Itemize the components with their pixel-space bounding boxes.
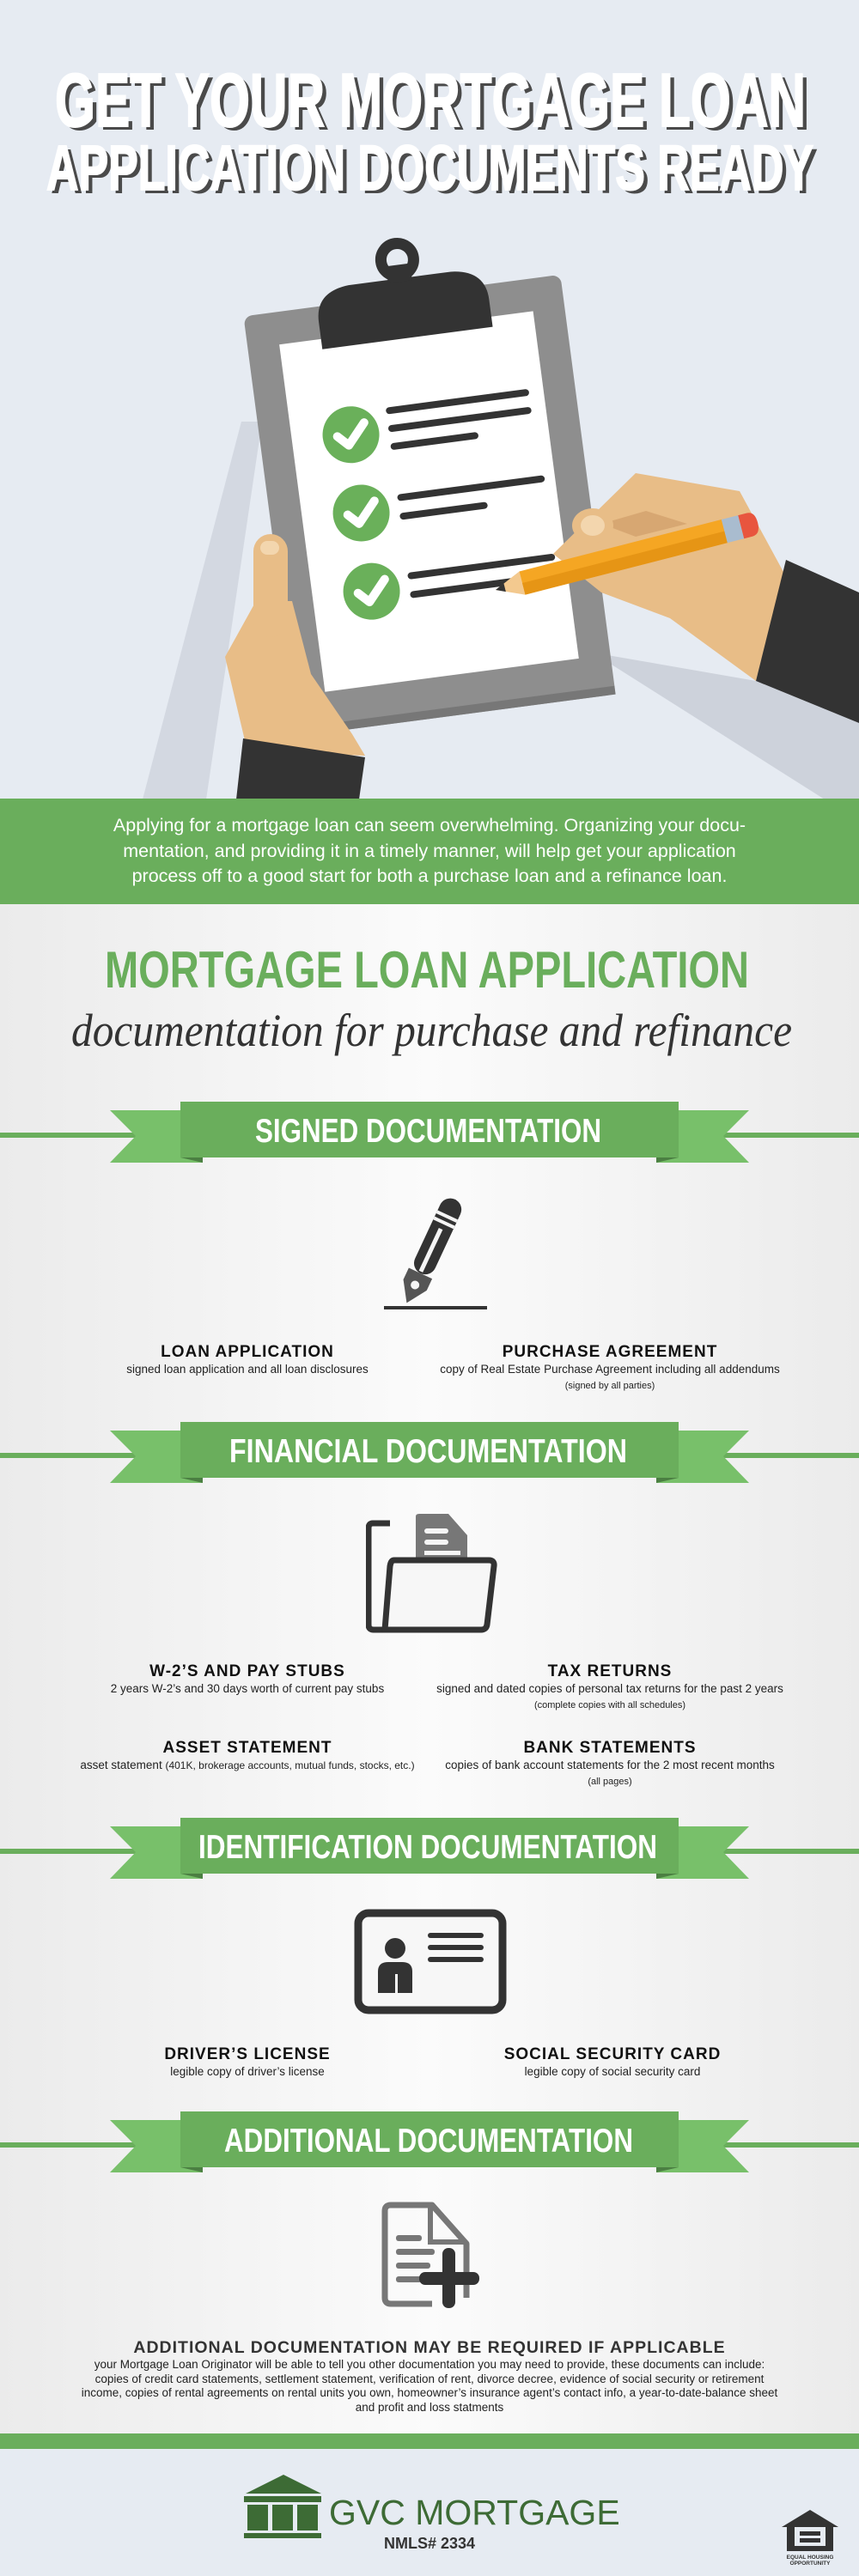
ribbon: additional documentation: ADDITIONAL DOCUMENTATION [224,2123,633,2160]
item: loan application: signed loan application and all loan disclosures [126,1363,369,1376]
item: tax returns [436,1662,783,1710]
item: asset statement [80,1739,415,1771]
thumb on pencil [572,508,613,543]
ribbon: identification documentation: IDENTIFICATION DOCUMENTATION [198,1829,657,1866]
item: driver's license [164,2045,331,2078]
additional text block: your Mortgage Loan Originator will be able to tell you other documentation you may need to provide, these documents can include: [94,2358,765,2371]
title [46,58,818,207]
ribbon: financial documentation: FINANCIAL DOCUMENTATION [229,1433,627,1470]
item: tax returns: TAX RETURNS [548,1662,672,1680]
icon: document plus [381,2202,479,2308]
item: purchase agreement [440,1343,780,1391]
pencil [493,511,761,602]
intro band: Applying for a mortgage loan can seem overwhelming. Organizing your docu- [113,815,746,835]
item: bank statements: copies of bank account statements for the 2 most recent months [445,1759,775,1771]
intro band: process off to a good start for both a purchase loan and a refinance loan. [132,866,727,886]
hero illustration [46,0,859,799]
item: bank statements: BANK STATEMENTS [523,1739,697,1757]
footer: GVC MORTGAGE [329,2493,620,2532]
additional text block: ADDITIONAL DOCUMENTATION MAY BE REQUIRED IF APPLICABLE [133,2338,726,2357]
shadow right [593,653,859,799]
ribbon: signed documentation [0,1102,859,1163]
item: loan application [126,1343,369,1376]
icon: pen [384,1199,487,1309]
item: social security card: legible copy of social security card [525,2065,700,2078]
item: purchase agreement: (signed by all parties) [565,1381,655,1391]
item: asset statement: ASSET STATEMENT [163,1739,332,1757]
icon: equal housing: OPPORTUNITY [790,2561,831,2567]
additional text block [82,2338,778,2414]
logo [244,2475,321,2538]
item: purchase agreement: PURCHASE AGREEMENT [503,1343,717,1361]
item: driver's license: DRIVER’S LICENSE [164,2045,331,2063]
item: social security card [504,2045,721,2078]
ribbon: signed documentation: SIGNED DOCUMENTATION [255,1113,601,1150]
section title: documentation for purchase and refinance [71,1005,792,1056]
shadow left [143,422,262,799]
item: w-2: 2 years W-2’s and 30 days worth of current pay stubs [111,1682,384,1695]
additional text block: income, copies of rental agreements on rental units you own, homeowner’s insurance agent’s contact info, a year-to-date-balance sheet [82,2386,777,2399]
footer [0,2433,859,2576]
ribbon: financial documentation [0,1422,859,1483]
additional text block: copies of credit card statements, settlement statement, verification of rent, divorce decree, evidence of social security or retirement [95,2372,764,2385]
ribbon: additional documentation [0,2111,859,2172]
icon: equal housing [782,2510,838,2567]
icon: equal housing: EQUAL HOUSING [787,2555,833,2561]
item: loan application: LOAN APPLICATION [161,1343,334,1361]
section title [71,941,792,1056]
icon: id card [354,1910,507,2014]
item: asset statement: asset statement (401K, brokerage accounts, mutual funds, stocks, etc.) [80,1759,415,1771]
item: tax returns: (complete copies with all schedules) [534,1700,685,1710]
additional text block: and profit and loss statments [356,2401,503,2414]
ribbon: identification documentation [0,1818,859,1879]
item: bank statements: (all pages) [588,1777,632,1787]
intro band [0,799,859,904]
item: w-2 [111,1662,384,1695]
item: w-2: W-2’S AND PAY STUBS [149,1662,345,1680]
item: tax returns: signed and dated copies of personal tax returns for the past 2 years [436,1682,783,1695]
item: purchase agreement: copy of Real Estate Purchase Agreement including all addendums [440,1363,780,1376]
item: driver's license: legible copy of driver’s license [170,2065,325,2078]
right hand [553,473,859,723]
intro band: mentation, and providing it in a timely manner, will help get your application [123,840,736,860]
clipboard [237,222,616,736]
checks [320,403,404,623]
footer: NMLS# 2334 [384,2535,475,2552]
item: social security card: SOCIAL SECURITY CARD [504,2045,721,2063]
item: bank statements [445,1739,775,1787]
left hand [225,534,365,799]
icon: folder [366,1514,497,1633]
